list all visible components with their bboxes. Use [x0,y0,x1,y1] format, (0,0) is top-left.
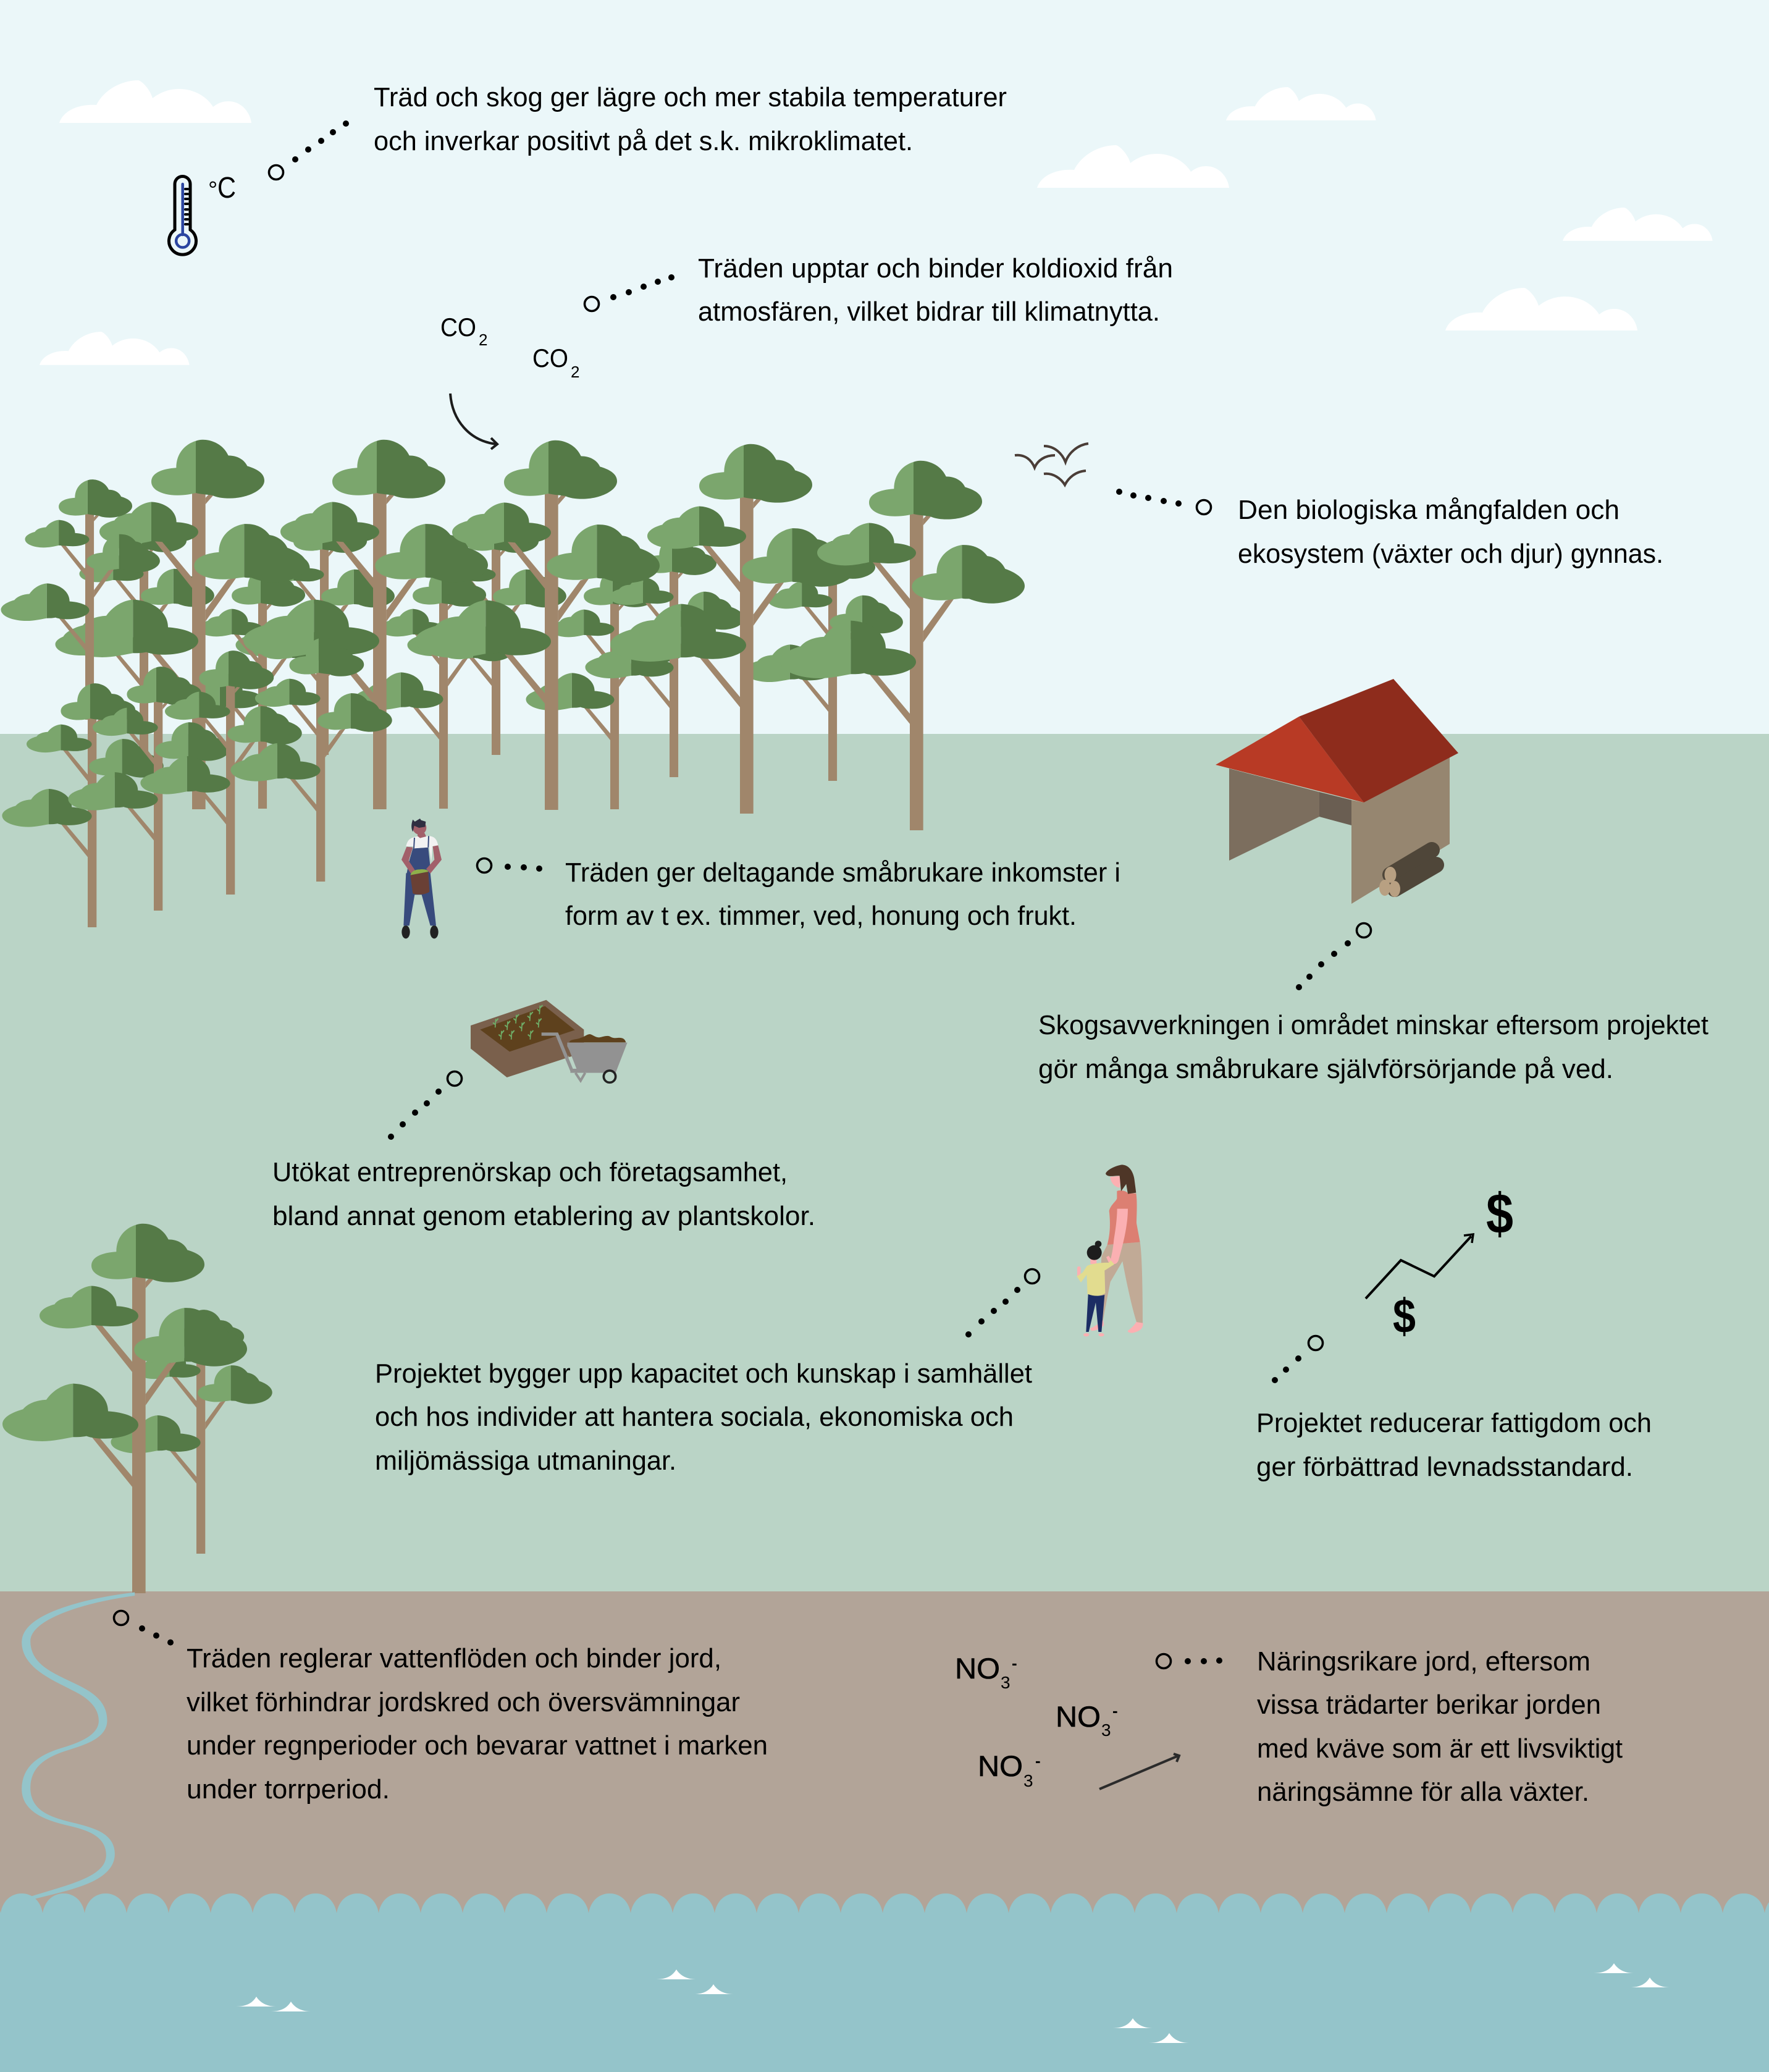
background: soil [0,1591,1769,1913]
text: poverty: Projektet reducerar fattigdom och [1256,1408,1652,1438]
text: soil nutrients: med kväve som är ett livsviktigt [1257,1733,1623,1764]
CO2 label one: 2 [479,331,487,349]
connector: soil nutrients [1156,1654,1222,1668]
CO2 label one [440,313,487,349]
text: capacity: och hos individer att hantera sociala, ekonomiska och [375,1402,1014,1432]
connector: carbon [584,274,674,311]
text: deforestation: gör många småbrukare självförsörjande på ved. [1038,1054,1613,1084]
clouds [40,80,1713,365]
text: income: form av t ex. timmer, ved, honung och frukt. [565,901,1077,931]
icon: woman and child [1077,1164,1143,1336]
background: ground [0,734,1769,1591]
wave crests [236,1963,1670,2043]
nitrate label three: 3 [1023,1771,1033,1790]
text: entrepreneurship [272,1157,815,1231]
text: carbon: Träden upptar och binder koldioxid från [698,253,1173,284]
nitrate label one [955,1652,1017,1692]
nitrate label two: 3 [1101,1720,1111,1740]
text: income: Träden ger deltagande småbrukare inkomster i [565,857,1120,888]
text: temperature: och inverkar positivt på det s.k. mikroklimatet. [374,126,913,156]
nitrate label two [1056,1700,1118,1740]
text: water regulation: under torrperiod. [187,1774,390,1805]
nitrate label three [978,1750,1041,1790]
text: deforestation [1038,1010,1708,1084]
text: water regulation: under regnperioder och bevarar vattnet i marken [187,1730,768,1761]
text: capacity: Projektet bygger upp kapacitet och kunskap i samhället [375,1358,1032,1389]
icon: rising income chart: $ [1486,1182,1513,1245]
nitrate label one: 3 [1001,1673,1011,1692]
degrees celsius label: C [217,172,236,204]
text: income [565,857,1120,931]
icon: rising income chart: $ [1393,1289,1416,1343]
icon: wood shed [1216,679,1458,904]
CO2 label two [532,343,579,381]
icon: rising income chart [1366,1182,1513,1343]
text: soil nutrients [1257,1646,1623,1807]
text: soil nutrients: näringsämne för alla växter. [1257,1777,1589,1807]
connector: entrepreneurship [388,1071,462,1140]
nitrate label two: - [1112,1701,1118,1720]
text: entrepreneurship: bland annat genom etablering av plantskolor. [272,1201,815,1231]
icon: thermometer [169,177,196,255]
nitrate label three: - [1035,1751,1041,1770]
forest [1,440,1025,927]
background: sky [0,0,1769,734]
text: biodiversity: Den biologiska mångfalden och [1238,495,1620,525]
connector: poverty [1272,1336,1323,1383]
trees by the stream [2,1224,272,1593]
text: biodiversity [1238,495,1663,569]
text: poverty [1256,1408,1652,1482]
text: temperature [374,82,1007,156]
icon: birds [1015,444,1088,485]
text: temperature: Träd och skog ger lägre och mer stabila temperaturer [374,82,1007,112]
text: soil nutrients: Näringsrikare jord, eftersom [1257,1646,1590,1677]
connector: water regulation [114,1611,174,1646]
nitrate label one: NO [955,1652,1000,1685]
nitrate label two: NO [1056,1700,1101,1733]
connector: deforestation [1296,923,1371,990]
connector: biodiversity [1116,489,1211,514]
arrow: nitrate enrichment [1099,1754,1179,1789]
stream [22,1593,134,1898]
text: carbon: atmosfären, vilket bidrar till klimatnytta. [698,297,1160,327]
nitrate label one: - [1012,1654,1017,1672]
text: deforestation: Skogsavverkningen i området minskar eftersom projektet [1038,1010,1708,1040]
text: water regulation: Träden reglerar vattenflöden och binder jord, [187,1643,721,1674]
text: entrepreneurship: Utökat entreprenörskap och företagsamhet, [272,1157,788,1187]
connector: temperature [269,120,349,179]
text: capacity: miljömässiga utmaningar. [375,1446,676,1476]
arrow: CO2 into forest [450,394,497,449]
text: water regulation [187,1643,768,1805]
text: capacity [375,1358,1032,1476]
icon: plant nursery and wheelbarrow [471,1000,628,1082]
degrees celsius label: ° [208,177,217,203]
connector: capacity [965,1269,1039,1337]
degrees celsius label [208,172,236,204]
text: water regulation: vilket förhindrar jordskred och översvämningar [187,1687,740,1717]
connector: income [477,859,542,872]
text: soil nutrients: vissa trädarter berikar jorden [1257,1690,1601,1720]
text: poverty: ger förbättrad levnadsstandard. [1256,1452,1633,1482]
icon: farmer [401,819,442,938]
water [0,1893,1769,2072]
nitrate label three: NO [978,1750,1023,1782]
text: carbon [698,253,1173,327]
CO2 label two: CO [532,343,568,373]
CO2 label one: CO [440,313,476,342]
CO2 label two: 2 [571,363,579,381]
text: biodiversity: ekosystem (växter och djur) gynnas. [1238,539,1663,569]
